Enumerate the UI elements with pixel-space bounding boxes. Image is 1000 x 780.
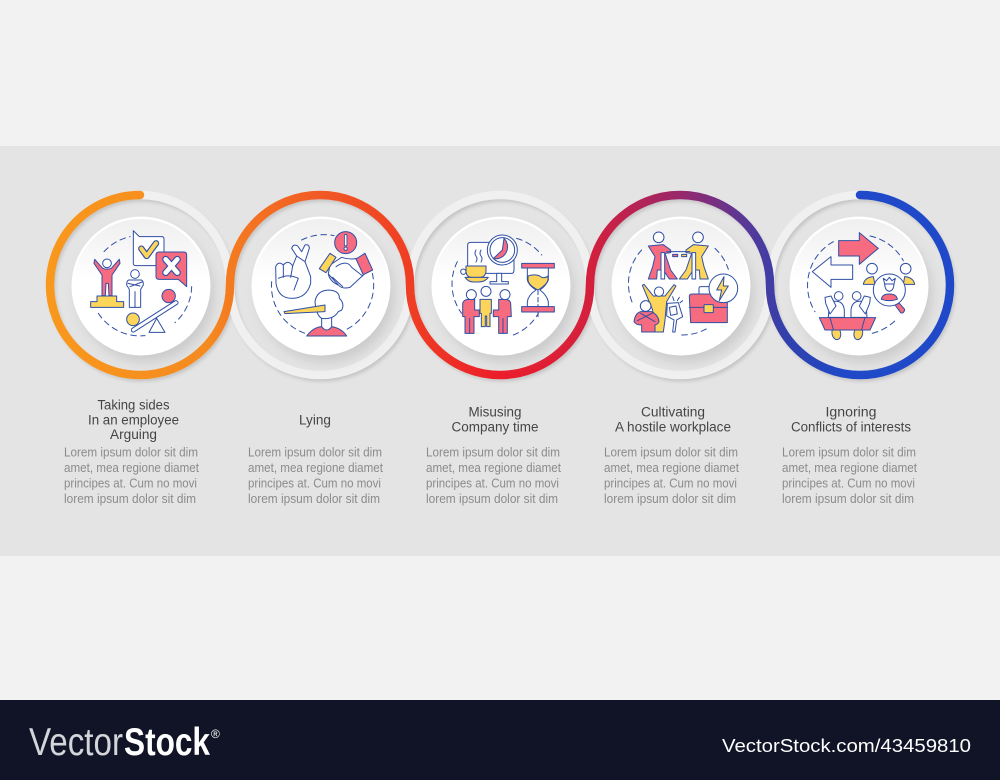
column 4 body text: amet, mea regione diamet — [604, 461, 739, 475]
column 2 body text: lorem ipsum dolor sit dim — [248, 492, 380, 506]
column 3 body text: Lorem ipsum dolor sit dim — [426, 446, 560, 460]
icon: hostile workplace — [628, 232, 738, 335]
column 1 body text: principes at. Cum no movi — [64, 476, 197, 490]
icon: misusing time — [452, 235, 554, 335]
column 2 heading: Lying — [299, 412, 331, 428]
column 2 body text: principes at. Cum no movi — [248, 476, 381, 490]
column 2 body text: Lorem ipsum dolor sit dim — [248, 446, 382, 460]
column 1 body text: Lorem ipsum dolor sit dim — [64, 446, 198, 460]
column 1 heading: In an employee — [88, 412, 179, 428]
column 5 body text: amet, mea regione diamet — [782, 461, 917, 475]
ring shadows — [52, 198, 952, 378]
column 4 heading: A hostile workplace — [615, 420, 731, 434]
footer logo: Vector — [29, 721, 123, 764]
column 2 body text: amet, mea regione diamet — [248, 461, 383, 475]
light background rings — [50, 195, 950, 375]
column 1 body text: lorem ipsum dolor sit dim — [64, 492, 196, 506]
column 5 heading: Ignoring — [826, 404, 876, 420]
footer bar — [0, 700, 1000, 780]
column 4 body text: Lorem ipsum dolor sit dim — [604, 446, 738, 460]
column 5 body text: Lorem ipsum dolor sit dim — [782, 446, 916, 460]
column 4 body text: lorem ipsum dolor sit dim — [604, 492, 736, 506]
column 3 heading: Company time — [452, 420, 538, 434]
coloured gradient flow line — [50, 195, 950, 375]
column 3 body text: principes at. Cum no movi — [426, 476, 559, 490]
column 4 heading: Cultivating — [641, 404, 705, 420]
icon: lying — [271, 232, 374, 336]
icon: taking sides — [91, 231, 192, 336]
column 3 body text: amet, mea regione diamet — [426, 461, 561, 475]
column 1 heading: Arguing — [110, 427, 157, 442]
footer logo: ® — [211, 727, 220, 741]
column 3 heading: Misusing — [468, 404, 522, 420]
white discs — [72, 216, 932, 362]
icon: conflicts of interests — [808, 233, 915, 340]
column 3 body text: lorem ipsum dolor sit dim — [426, 492, 558, 506]
column 1 body text: amet, mea regione diamet — [64, 461, 199, 475]
column 5 body text: principes at. Cum no movi — [782, 476, 915, 490]
column 5 heading: Conflicts of interests — [791, 420, 911, 434]
footer logo: Stock — [124, 721, 210, 764]
grey content band — [0, 146, 1000, 556]
footer image id: VectorStock.com/43459810 — [722, 736, 971, 756]
column 5 body text: lorem ipsum dolor sit dim — [782, 492, 914, 506]
column 1 heading: Taking sides — [98, 398, 170, 412]
column 4 body text: principes at. Cum no movi — [604, 476, 737, 490]
